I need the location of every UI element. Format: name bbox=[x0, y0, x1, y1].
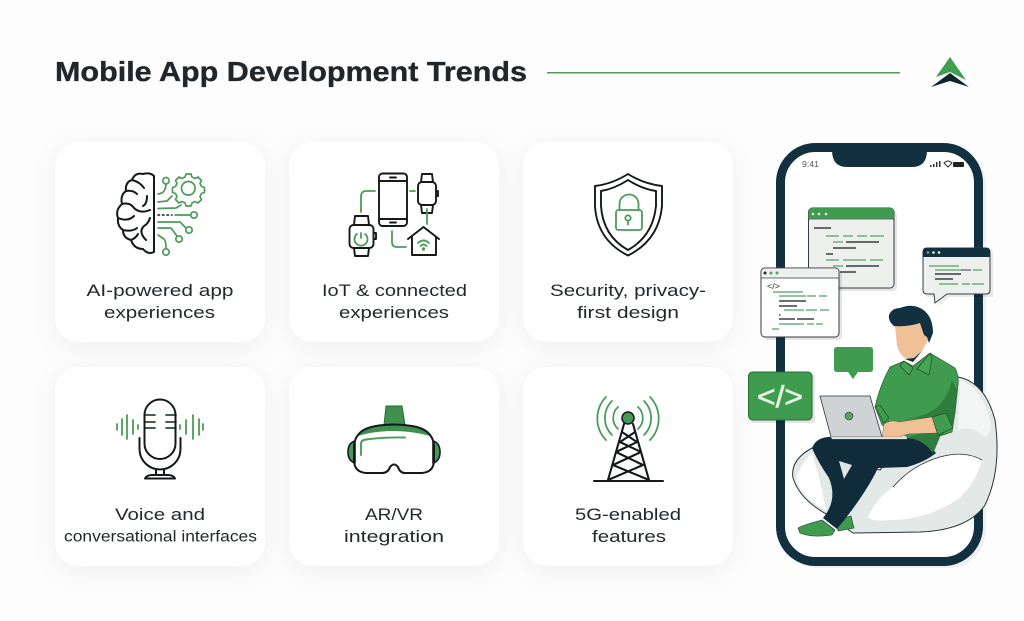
panel: voice and conversational interfaces bbox=[55, 367, 265, 566]
label bbox=[575, 505, 681, 546]
label: integration bbox=[344, 527, 444, 546]
label bbox=[550, 281, 706, 322]
label bbox=[86, 281, 234, 322]
panel: AI-powered app experiences bbox=[55, 142, 265, 342]
trousers bbox=[812, 437, 936, 529]
label: features bbox=[592, 527, 666, 546]
label: 5G-enabled bbox=[575, 505, 681, 524]
code badge bbox=[748, 372, 815, 423]
panel: IoT and connected experiences bbox=[289, 142, 499, 342]
header rule bbox=[547, 72, 900, 74]
status bar bbox=[802, 159, 964, 169]
shirt bbox=[875, 353, 958, 453]
label: Security, privacy- bbox=[550, 281, 706, 300]
window: front code panel: </> bbox=[767, 281, 780, 291]
code badge: </> bbox=[757, 379, 803, 414]
label: experiences bbox=[104, 303, 215, 322]
panel: AR/VR integration bbox=[289, 367, 499, 566]
arm and hand bbox=[882, 417, 937, 437]
phone frame bbox=[780, 147, 986, 568]
label: AI-powered app bbox=[86, 281, 234, 300]
illustration: phone with developer bbox=[748, 147, 997, 568]
label: conversational interfaces bbox=[64, 528, 257, 546]
label: Voice and bbox=[115, 505, 205, 524]
label: experiences bbox=[339, 303, 449, 322]
label bbox=[344, 505, 444, 546]
label bbox=[64, 505, 257, 546]
icon: connected devices bbox=[350, 174, 439, 256]
window: back code panel bbox=[808, 208, 897, 291]
shoes bbox=[837, 516, 854, 531]
icon: signal tower bbox=[594, 397, 663, 481]
label: IoT & connected bbox=[322, 281, 467, 300]
logo bbox=[931, 57, 969, 87]
window: chat code panel bbox=[923, 248, 993, 306]
panel: 5G-enabled features bbox=[523, 367, 733, 566]
label: AR/VR bbox=[365, 505, 423, 524]
head bbox=[895, 323, 928, 361]
label bbox=[322, 281, 467, 322]
panel: security, privacy-first design bbox=[523, 142, 733, 342]
icon: microphone with sound waves bbox=[117, 400, 203, 478]
developer figure bbox=[798, 306, 958, 536]
title: Mobile App Development Trends bbox=[55, 56, 527, 87]
beanbag bbox=[793, 377, 997, 533]
label: first design bbox=[577, 303, 679, 322]
window: front code panel bbox=[761, 268, 842, 340]
laptop bbox=[820, 396, 907, 439]
icon: VR headset bbox=[348, 406, 440, 473]
speech bubble bbox=[834, 347, 873, 379]
icon: shield with lock bbox=[595, 174, 662, 256]
status bar: 9:41 bbox=[802, 159, 819, 169]
icon: brain and circuits bbox=[117, 173, 204, 255]
